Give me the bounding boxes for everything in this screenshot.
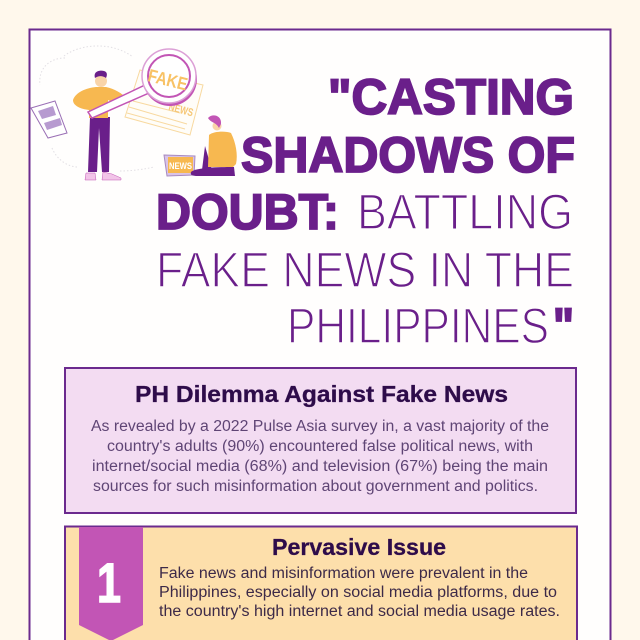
text block: survey findings (91, 418, 549, 495)
text block: pervasive issue description: Philippines, especially on social media platforms, due to (159, 584, 557, 601)
panel: pervasive issue (65, 526, 577, 640)
title: "CASTING (328, 69, 574, 125)
icon: newspaper: NEWS (167, 101, 194, 119)
text block: survey findings: country's adults (90%) encountered false political news, with (107, 438, 533, 455)
title: DOUBT: (156, 184, 339, 240)
figure: seated man with laptop: NEWS (169, 161, 192, 172)
icon: magnifying glass (88, 49, 197, 118)
panel: PH dilemma (65, 368, 576, 513)
text block: survey findings: sources for such misinformation about government and politics. (93, 478, 538, 495)
heading: PH Dilemma Against Fake News: PH Dilemma Against Fake News (135, 381, 508, 407)
figure: standing man (73, 71, 130, 180)
icon: newspaper (125, 70, 203, 135)
text block: survey findings: As revealed by a 2022 Pulse Asia survey in, a vast majority of the (91, 418, 549, 435)
text block: pervasive issue description: Fake news and misinformation were prevalent in the (159, 565, 528, 582)
illustration: people investigating fake news (31, 46, 237, 180)
figure: seated man with laptop (164, 115, 237, 176)
title: " (553, 298, 574, 354)
title: BATTLING (357, 184, 573, 240)
title: PHILIPPINES (287, 298, 549, 354)
icon: magnifying glass: FAKE (146, 65, 190, 94)
text block: pervasive issue description: the country's high internet and social media usage rates. (159, 603, 560, 620)
title: SHADOWS OF (241, 127, 575, 183)
ribbon badge: number 1: 1 (97, 551, 121, 614)
title: FAKE NEWS IN THE (156, 242, 574, 298)
icon: document (31, 101, 67, 138)
title (156, 69, 575, 354)
text block: pervasive issue description (159, 565, 560, 620)
ribbon badge: number 1 (79, 527, 143, 640)
heading: Pervasive Issue: Pervasive Issue (272, 534, 446, 560)
text block: survey findings: internet/social media (68%) and television (67%) being the main (92, 458, 548, 475)
